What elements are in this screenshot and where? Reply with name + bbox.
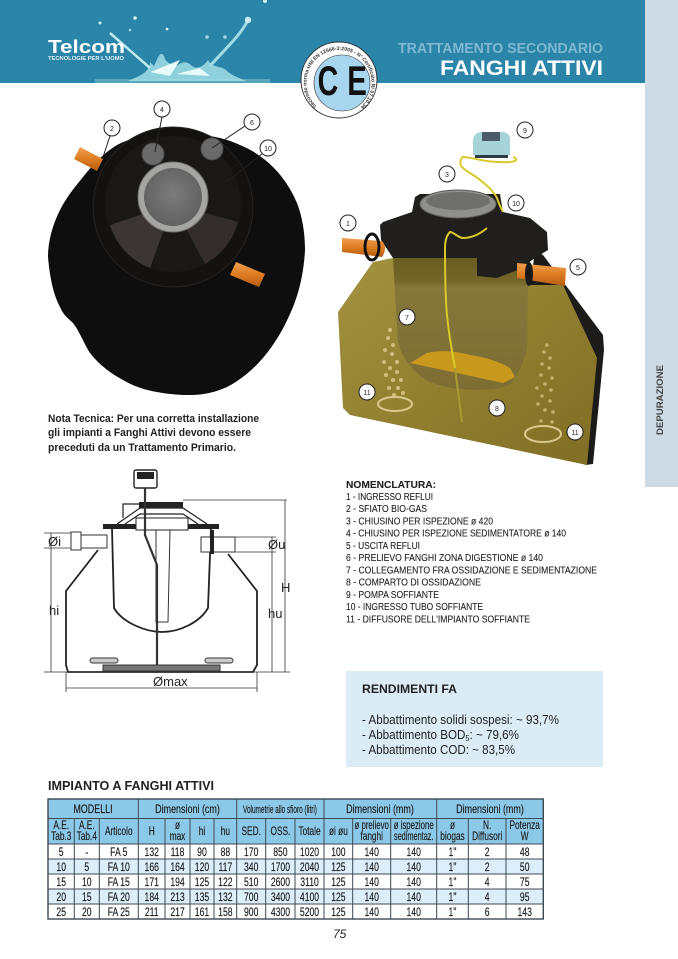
table data rows: - — [85, 847, 88, 859]
CE certification seal: E — [347, 57, 367, 104]
callouts: 11 — [363, 390, 371, 397]
technical section drawing — [44, 470, 290, 692]
panel: rendimenti FA — [346, 671, 603, 767]
table column headers: Potenza — [510, 820, 540, 832]
CE certification seal: C — [318, 56, 338, 104]
table data rows: 2 — [485, 862, 490, 874]
technical note — [48, 413, 259, 454]
table data rows: 170 — [244, 847, 259, 859]
side tab: depurazione — [645, 0, 678, 487]
table data rows: 125 — [331, 892, 346, 904]
table data rows: 88 — [221, 847, 230, 859]
data table — [48, 799, 543, 919]
table column headers: Diffusori — [472, 831, 502, 843]
table data rows: 850 — [273, 847, 288, 859]
callouts: 5 — [576, 265, 580, 272]
table data rows: 48 — [520, 847, 530, 859]
table data rows: 164 — [170, 862, 185, 874]
nomenclature list: 7 - COLLEGAMENTO FRA OSSIDAZIONE E SEDIMENTAZIONE — [346, 566, 597, 576]
collar ring — [93, 127, 253, 287]
table column headers: Totale — [298, 826, 321, 838]
pipe outlet — [230, 262, 265, 287]
table data rows: 1" — [449, 847, 457, 859]
baffle — [156, 530, 170, 622]
table data rows: 5 — [59, 847, 64, 859]
panel: rendimenti FA: 5 — [465, 734, 470, 743]
pump head — [134, 470, 157, 488]
table data rows: 140 — [407, 892, 421, 904]
table data rows: 184 — [145, 892, 159, 904]
table data rows: 125 — [331, 862, 346, 874]
table column headers: A.E. — [53, 820, 69, 832]
nomenclature list: 5 - USCITA REFLUI — [346, 541, 420, 552]
diffusers — [90, 658, 233, 671]
callouts: 7 — [405, 315, 409, 322]
diffuser rings — [378, 397, 561, 442]
table data rows: 1" — [449, 877, 457, 889]
table data rows: 140 — [407, 877, 421, 889]
central lid — [138, 162, 208, 232]
air tube — [445, 157, 516, 368]
callouts — [103, 101, 276, 183]
callouts: 9 — [523, 128, 527, 135]
table data rows: FA 20 — [108, 892, 130, 904]
technical note: gli impianti a Fanghi Attivi devono essere — [48, 427, 251, 439]
table data rows: 143 — [518, 907, 532, 919]
table data rows: 158 — [218, 907, 233, 919]
table data rows: 510 — [244, 877, 259, 889]
table data rows: 117 — [219, 862, 233, 874]
table column headers: ø ispezione — [394, 820, 434, 833]
table column headers: ø — [175, 820, 180, 832]
dimension labels: Øi — [48, 534, 61, 549]
table column headers: sedimentaz. — [394, 830, 434, 844]
dome and flange — [117, 504, 207, 524]
table data rows: 3110 — [300, 877, 319, 889]
table data rows: 15 — [82, 892, 92, 904]
table data rows: 171 — [145, 877, 159, 889]
table column headers: max — [170, 831, 185, 843]
table data rows: 140 — [365, 907, 379, 919]
table data rows: 140 — [407, 907, 421, 919]
pipe 2 — [74, 147, 103, 171]
header title: FANGHI ATTIVI — [440, 57, 603, 80]
callouts: 10 — [264, 146, 272, 153]
technical note: preceduti da un Trattamento Primario. — [48, 442, 236, 454]
lower air tube — [455, 368, 462, 422]
table data rows: 122 — [218, 877, 233, 889]
logo: Telcom: Telcom — [48, 36, 125, 57]
table data rows: 118 — [171, 847, 185, 859]
table data rows: 2600 — [271, 877, 290, 889]
outlet pipe 5 — [517, 262, 566, 286]
right bubbles — [535, 343, 555, 424]
inner chamber — [393, 258, 530, 390]
table data rows: 166 — [145, 862, 159, 874]
table column headers: A.E. — [79, 820, 95, 832]
callouts: 1 — [346, 221, 350, 228]
table data rows: 20 — [82, 907, 92, 919]
table group headers: Volumetrie allo sfioro (litri) — [243, 803, 317, 815]
tank body — [48, 133, 305, 395]
technical section drawing: hi — [49, 603, 59, 618]
nomenclature list: 1 - INGRESSO REFLUI — [346, 492, 433, 503]
table column headers: biogas — [440, 831, 465, 843]
table data rows: 1" — [449, 907, 457, 919]
table group headers: MODELLI — [73, 804, 113, 816]
table data rows: 4 — [485, 877, 490, 889]
table data rows: 132 — [218, 892, 233, 904]
inlet pipe 1 — [342, 234, 385, 260]
table column headers: Articolo — [105, 826, 133, 838]
table column headers: ø prelievo — [355, 820, 389, 833]
table data rows: 90 — [197, 847, 207, 859]
panel: rendimenti FA: : ~ 79,6% — [470, 728, 519, 742]
table group headers: Dimensioni (mm) — [456, 804, 524, 816]
table data rows: 1020 — [300, 847, 319, 859]
table column headers: OSS. — [271, 826, 290, 838]
table data rows: 50 — [520, 862, 530, 874]
technical section drawing: Ømax — [153, 674, 188, 689]
table column headers: W — [521, 831, 529, 843]
technical note: Nota Tecnica: Per una corretta installazione — [48, 413, 259, 425]
nomenclature list: 3 - CHIUSINO PER ISPEZIONE ø 420 — [346, 516, 493, 528]
table data rows: 6 — [485, 907, 490, 919]
table data rows: 211 — [145, 907, 159, 919]
table data rows: 132 — [145, 847, 159, 859]
nomenclature list: 11 - DIFFUSORE DELL'IMPIANTO SOFFIANTE — [346, 614, 530, 626]
small cover 4 — [142, 143, 164, 165]
inlet pipe — [71, 532, 107, 550]
table data rows: 120 — [195, 862, 209, 874]
riser tube — [145, 488, 157, 665]
table data rows: 20 — [56, 892, 66, 904]
nomenclature list: 8 - COMPARTO DI OSSIDAZIONE — [346, 578, 481, 588]
table data rows: 1" — [449, 862, 457, 874]
table data rows: 1" — [449, 892, 457, 904]
table data rows: 10 — [82, 877, 92, 889]
table data rows: 125 — [331, 907, 346, 919]
table column headers: N. — [483, 820, 491, 832]
nomenclature list: 4 - CHIUSINO PER ISPEZIONE SEDIMENTATORE ø 140 — [346, 528, 566, 540]
outlet pipe — [201, 537, 235, 552]
table data rows: 161 — [195, 907, 209, 919]
outer shell — [66, 550, 257, 672]
sludge floor — [410, 351, 515, 383]
table data rows: 15 — [56, 877, 66, 889]
yellow outer body — [338, 258, 597, 465]
callouts: 4 — [160, 107, 164, 114]
nomenclature list — [346, 480, 597, 626]
callouts: 3 — [445, 172, 449, 179]
table data rows: 1700 — [271, 862, 290, 874]
table data rows: 135 — [195, 892, 209, 904]
table data rows: FA 10 — [108, 862, 130, 874]
page number: 75 — [333, 927, 347, 941]
table column headers: øi øu — [329, 826, 348, 838]
table data rows: FA 25 — [108, 907, 130, 919]
water splash — [95, 0, 270, 83]
nomenclature list: 9 - POMPA SOFFIANTE — [346, 590, 439, 601]
table data rows: 2040 — [300, 862, 319, 874]
table data rows: 5200 — [300, 907, 319, 919]
table data rows: FA 5 — [110, 847, 128, 859]
callouts: 8 — [495, 406, 499, 413]
blower pump — [473, 132, 510, 158]
header title: TRATTAMENTO SECONDARIO — [398, 41, 603, 57]
table data rows: FA 15 — [108, 877, 130, 889]
table data rows: 700 — [244, 892, 259, 904]
table data rows: 900 — [244, 907, 259, 919]
table group headers — [73, 803, 524, 816]
table data rows: 140 — [365, 892, 379, 904]
table data rows: 100 — [331, 847, 346, 859]
CE certification seal — [300, 42, 378, 118]
nomenclature list: 2 - SFIATO BIO-GAS — [346, 504, 427, 515]
table data rows: 4 — [485, 892, 490, 904]
table data rows: 217 — [170, 907, 185, 919]
table data rows: 10 — [56, 862, 66, 874]
table column headers: Tab.3 — [51, 831, 72, 843]
technical section drawing: Øu — [268, 537, 285, 552]
table data rows: 140 — [365, 847, 379, 859]
small cover 6 — [201, 138, 223, 160]
callouts: 10 — [512, 201, 520, 208]
table data rows: 125 — [195, 877, 209, 889]
callouts: 11 — [571, 430, 579, 437]
table data rows: 213 — [170, 892, 185, 904]
table data rows: 140 — [365, 877, 379, 889]
callouts: 2 — [110, 126, 114, 133]
table column headers: ø — [450, 820, 455, 832]
table data rows: 2 — [485, 847, 490, 859]
inspection lid — [420, 190, 496, 218]
header title — [398, 41, 603, 80]
left bubbles — [382, 328, 405, 397]
table data rows: 194 — [170, 877, 185, 889]
technical section drawing: hu — [268, 606, 282, 621]
header band — [0, 0, 645, 83]
nomenclature list: 10 - INGRESSO TUBO SOFFIANTE — [346, 602, 483, 613]
inner vessel — [112, 528, 211, 632]
black shell — [530, 250, 604, 465]
table data rows: 140 — [407, 862, 421, 874]
table title: IMPIANTO A FANGHI ATTIVI — [48, 778, 214, 793]
table column headers: SED. — [242, 826, 261, 838]
technical section drawing: H — [281, 580, 290, 595]
table column headers: fanghi — [360, 831, 383, 843]
tank top view photo — [48, 101, 305, 395]
nomenclature list: NOMENCLATURA: — [346, 480, 436, 491]
callouts: 6 — [250, 120, 254, 127]
dome — [105, 136, 241, 272]
table data rows: 140 — [365, 862, 379, 874]
panel: rendimenti FA: - Abbattimento solidi sospesi: ~ 93,7% — [362, 713, 559, 727]
table column headers: Tab.4 — [77, 831, 97, 843]
table data rows: 4100 — [300, 892, 319, 904]
panel: rendimenti FA: - Abbattimento COD: ~ 83,5% — [362, 743, 515, 757]
logo: Telcom — [48, 36, 125, 62]
table column headers — [51, 820, 540, 844]
table group headers: Dimensioni (cm) — [155, 804, 220, 816]
table group headers: Dimensioni (mm) — [346, 804, 414, 816]
table data rows: 25 — [56, 907, 66, 919]
black top section — [380, 194, 548, 278]
side tab: depurazione: DEPURAZIONE — [655, 365, 666, 435]
nomenclature list: 6 - PRELIEVO FANGHI ZONA DIGESTIONE ø 140 — [346, 553, 543, 564]
table data rows: 5 — [84, 862, 89, 874]
cutaway tank illustration — [338, 122, 604, 465]
table data rows: 3400 — [271, 892, 290, 904]
callouts — [340, 122, 586, 440]
table data rows: 125 — [331, 877, 346, 889]
table data rows — [56, 847, 532, 919]
logo: Telcom: TECNOLOGIE PER L'UOMO — [48, 56, 124, 62]
table data rows: 75 — [520, 877, 530, 889]
panel: rendimenti FA: RENDIMENTI FA — [362, 682, 457, 696]
panel: rendimenti FA: - Abbattimento BOD — [362, 728, 473, 742]
table column headers: H — [149, 826, 155, 838]
table data rows: 95 — [520, 892, 530, 904]
table column headers: hu — [221, 826, 230, 838]
table data rows: 340 — [244, 862, 259, 874]
table column headers: hi — [199, 826, 205, 838]
dimension lines — [44, 500, 290, 692]
table data rows: 4300 — [271, 907, 290, 919]
table data rows: 140 — [407, 847, 421, 859]
